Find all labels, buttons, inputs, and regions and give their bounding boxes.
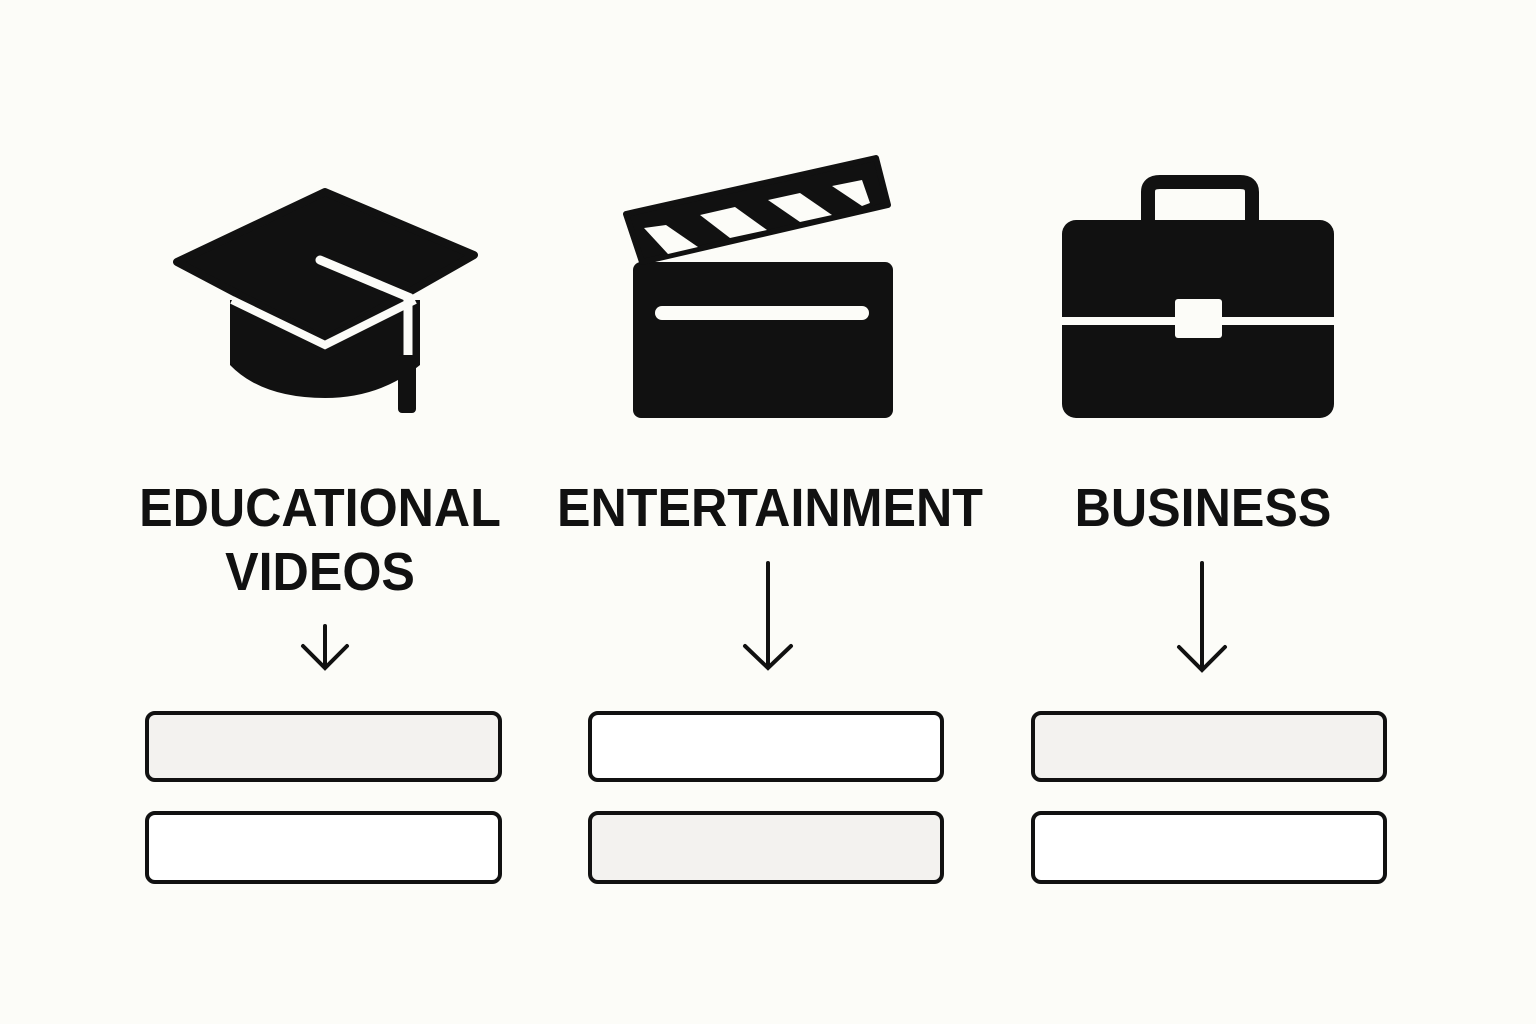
heading: educational videos <box>139 478 501 602</box>
heading: educational videos: EDUCATIONAL <box>139 478 501 538</box>
arrow: educational <box>303 626 347 668</box>
arrow: entertainment <box>745 563 791 668</box>
icon: graduation cap <box>177 192 474 413</box>
box: business 1 <box>1031 711 1387 782</box>
box: educational 2 <box>145 811 502 884</box>
box: entertainment 2 <box>588 811 944 884</box>
box: entertainment 1 <box>588 711 944 782</box>
box: educational 1 <box>145 711 502 782</box>
icon: briefcase <box>1062 182 1334 418</box>
heading: educational videos: VIDEOS <box>225 542 415 602</box>
icon: clapperboard <box>626 158 893 418</box>
arrow: business <box>1179 563 1225 670</box>
heading: business: BUSINESS <box>1075 478 1331 538</box>
box: business 2 <box>1031 811 1387 884</box>
heading: entertainment: ENTERTAINMENT <box>557 478 983 538</box>
